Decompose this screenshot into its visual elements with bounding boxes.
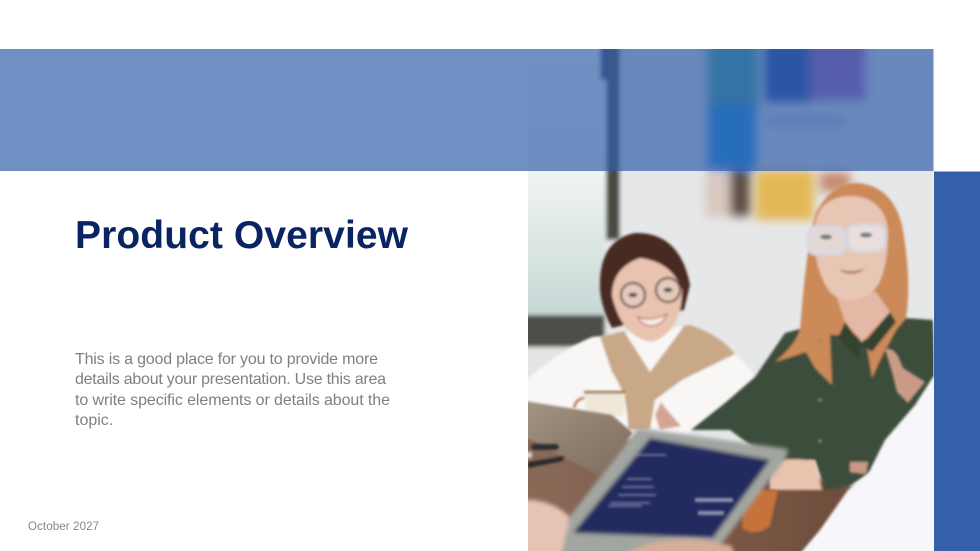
photo: coffee cup [574,391,625,416]
body text: to write specific elements or details about the [75,392,390,409]
body text: topic. [75,412,113,429]
right blue bar [934,172,980,551]
top blue band overlay [0,49,934,171]
photo: foreground hands [520,500,734,551]
photo: tablet [552,428,788,551]
photo: blurred posters [705,40,865,220]
photo: foreground person in white [798,377,940,551]
body text [75,351,390,429]
body text: This is a good place for you to provide more [75,351,378,368]
date footer: October 2027 [28,521,99,533]
photo: team meeting [520,40,940,551]
photo: woman in green shirt, right [691,183,940,490]
photo: orange pot [742,490,778,533]
title: Product Overview [75,214,409,257]
photo backdrop: office wall [528,49,934,486]
photo: woman with glasses, left [520,233,756,440]
photo: table [520,436,860,551]
photo: tablet screen text [608,454,733,515]
photo: laptop [525,401,633,476]
photo: table items [520,444,564,468]
photo: raised hand [885,349,925,403]
body text: details about your presentation. Use this area [75,371,386,388]
